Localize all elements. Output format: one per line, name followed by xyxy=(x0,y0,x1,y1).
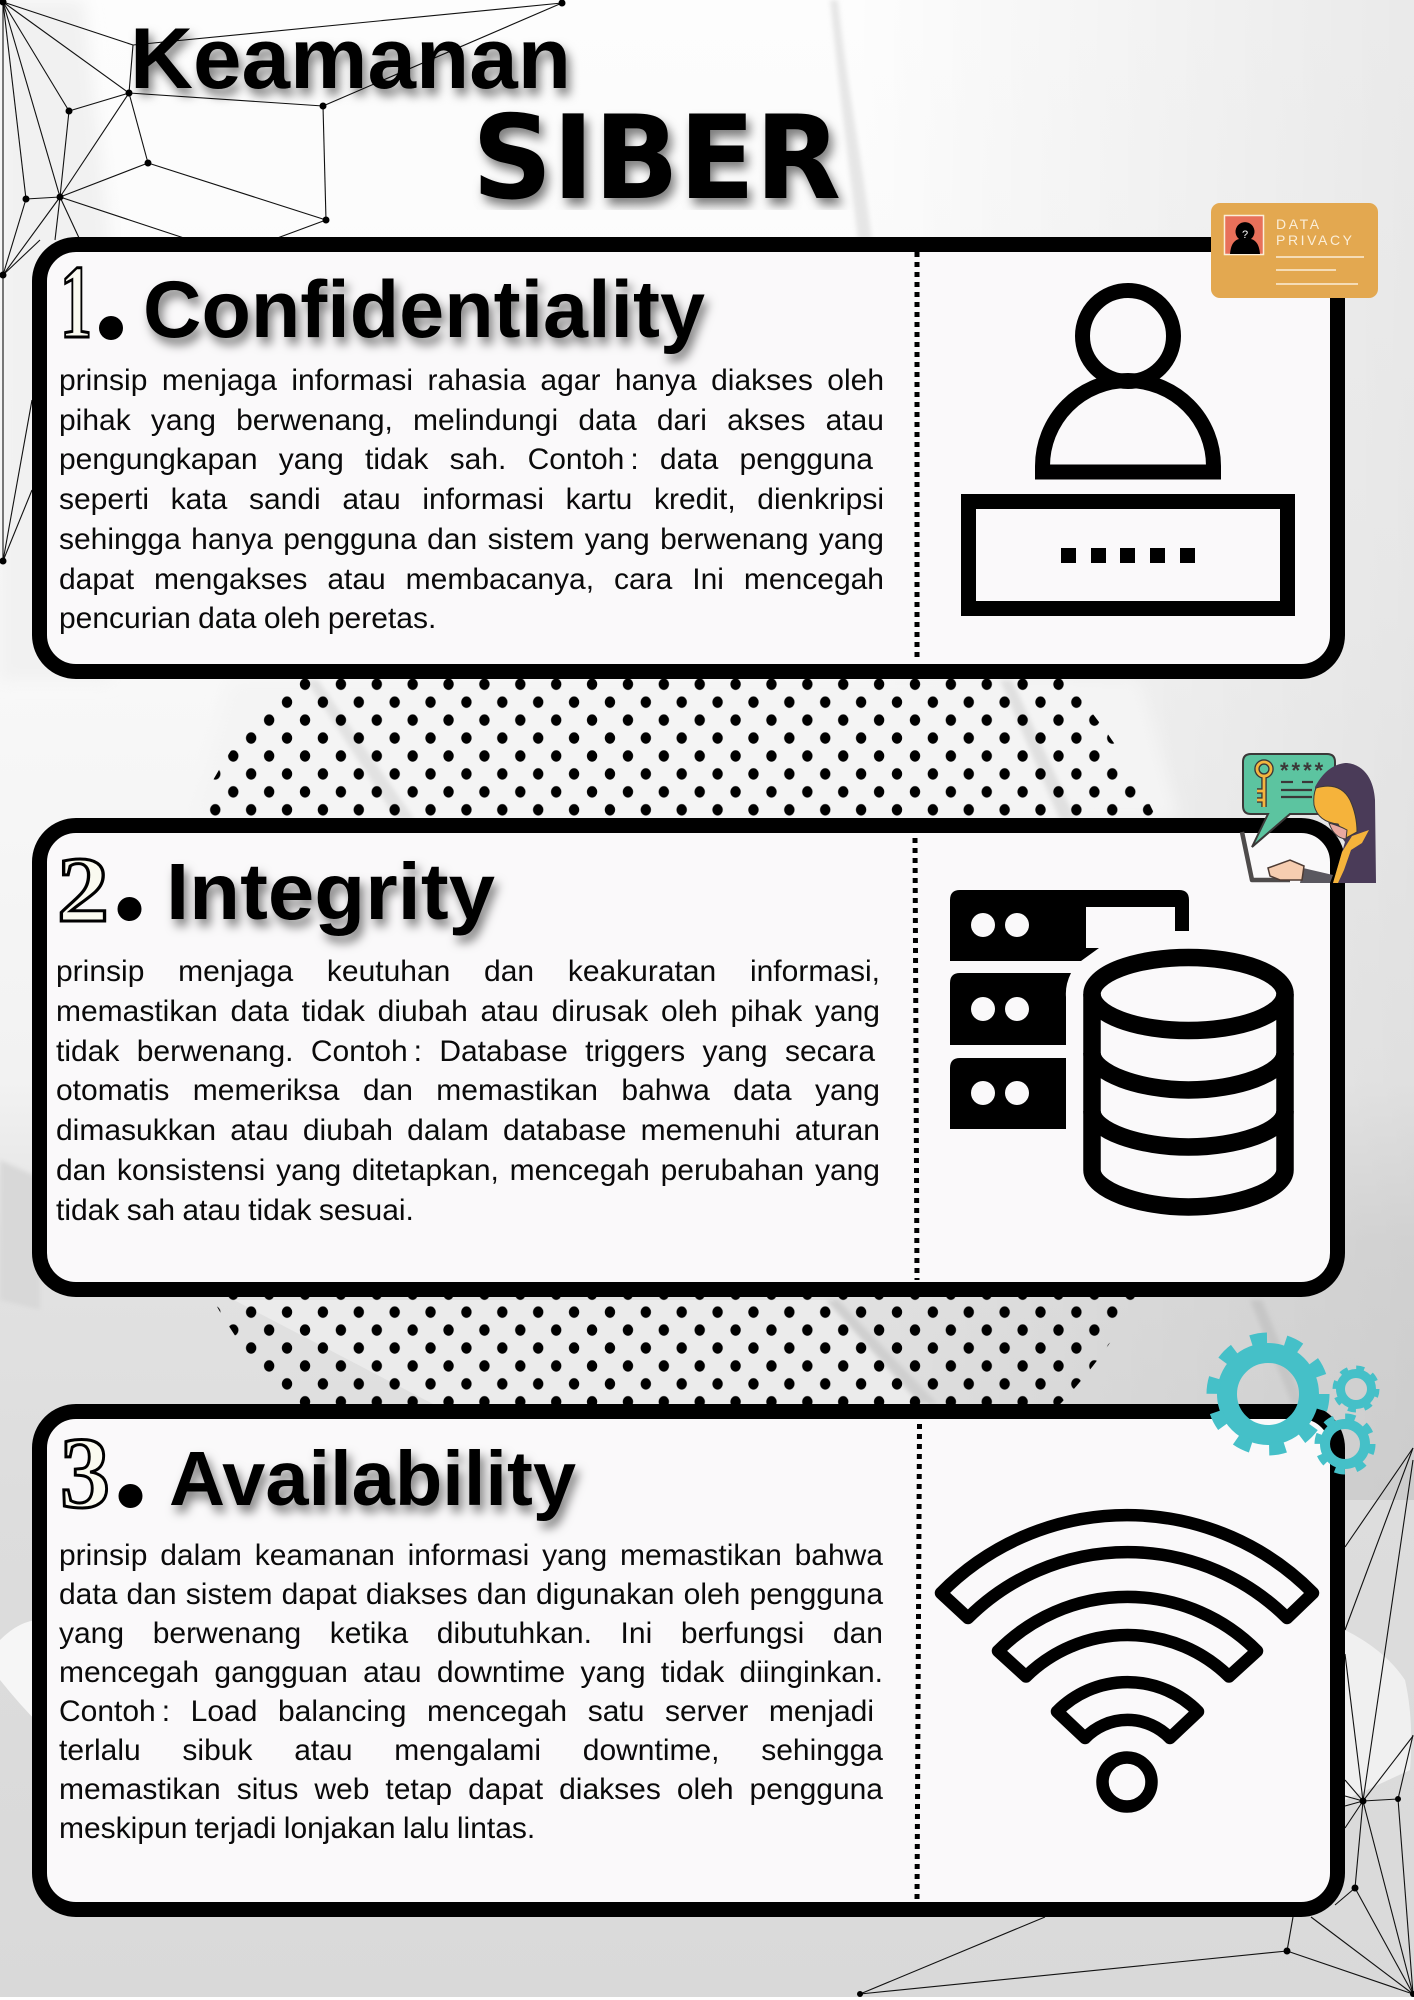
title line: Keamanan: Keamanan xyxy=(130,11,571,107)
text block: availability description: Contoh : Load balancing mencegah satu server menjadi xyxy=(59,1695,874,1728)
text block: confidentiality description: pencurian data oleh peretas. xyxy=(59,602,436,635)
text block: availability description xyxy=(59,1539,884,1845)
fold near title xyxy=(830,0,872,240)
text block: integrity description: tidak berwenang. Contoh : Database triggers yang secara xyxy=(56,1035,875,1068)
small gear bottom xyxy=(1318,1417,1372,1471)
text block: confidentiality description xyxy=(59,364,884,635)
text block: availability description: memastikan situs web tetap dapat diakses oleh pengguna xyxy=(59,1773,883,1806)
text block: availability description: data dan sistem dapat diakses dan digunakan oleh pengguna xyxy=(59,1578,883,1611)
heading and illustration: integrity: 2 xyxy=(57,839,109,942)
text block: confidentiality description: prinsip menjaga informasi rahasia agar hanya diakses oleh xyxy=(59,364,884,397)
text block: availability description: meskipun terjadi lonjakan lalu lintas. xyxy=(59,1812,535,1845)
text block: integrity description: tidak sah atau tidak sesuai. xyxy=(56,1194,414,1227)
heading and illustration: confidentiality xyxy=(60,243,1295,657)
heading and illustration: confidentiality: Confidentiality xyxy=(143,265,705,355)
icon: database cylinder xyxy=(1092,958,1285,1207)
panel: availability xyxy=(32,1404,1345,1917)
heading and illustration: integrity xyxy=(57,838,1294,1280)
sticker: data privacy card xyxy=(1211,203,1378,298)
sticker: data privacy card: DATA xyxy=(1276,216,1322,232)
text block: availability description: mencegah gangguan atau downtime yang tidak diinginkan. xyxy=(59,1656,883,1689)
title xyxy=(130,11,847,210)
text block: confidentiality description: pihak yang berwenang, melindungi data dari akses atau xyxy=(59,404,884,437)
text block: confidentiality description: dapat mengakses atau membacanya, cara Ini mencegah xyxy=(59,563,884,596)
icon: wifi signal xyxy=(941,1515,1313,1806)
icon: user with password box xyxy=(968,290,1288,608)
sticker: hacker with laptop and password bubble xyxy=(1240,753,1376,883)
speech bubble with key: **** xyxy=(1280,758,1326,783)
hooded figure xyxy=(1268,763,1376,883)
text block: integrity description: otomatis memeriksa dan memastikan bahwa data yang xyxy=(56,1074,880,1107)
text block: availability description: prinsip dalam keamanan informasi yang memastikan bahwa xyxy=(59,1539,883,1572)
light field behind upper dots xyxy=(190,680,1180,820)
heading and illustration: availability: Availability xyxy=(169,1436,576,1522)
text block: availability description: yang berwenang ketika dibutuhkan. Ini berfungsi dan xyxy=(59,1617,883,1650)
sticker: data privacy card: ? xyxy=(1242,229,1248,241)
left fold at the top xyxy=(0,0,110,680)
text block: integrity description: memastikan data tidak diubah atau dirusak oleh pihak yang xyxy=(56,995,880,1028)
heading and illustration: confidentiality: 1 xyxy=(60,243,92,360)
network lines top-left xyxy=(0,0,566,564)
laptop xyxy=(1242,832,1290,880)
large gear xyxy=(1213,1339,1323,1449)
text block: integrity description xyxy=(56,955,880,1227)
small gear top xyxy=(1335,1368,1377,1410)
text block: integrity description: dan konsistensi yang ditetapkan, mencegah perubahan yang xyxy=(56,1154,880,1187)
network lines bottom-right xyxy=(857,1448,1414,1997)
heading and illustration: availability xyxy=(60,1417,1320,1899)
text block: confidentiality description: seperti kata sandi atau informasi kartu kredit, dienkripsi xyxy=(59,483,884,516)
panel: integrity xyxy=(32,818,1345,1297)
sticker: teal gears xyxy=(1206,1332,1380,1474)
dot pattern circle xyxy=(145,510,1205,1570)
speech bubble with key xyxy=(1243,754,1335,847)
lower band fold shapes xyxy=(234,1300,929,1404)
text block: confidentiality description: pengungkapan yang tidak sah. Contoh : data pengguna xyxy=(59,443,873,476)
sticker: data privacy card: PRIVACY xyxy=(1276,232,1355,248)
heading and illustration: integrity: Integrity xyxy=(166,847,496,936)
icon: server blocks xyxy=(950,890,1189,1129)
text block: availability description: terlalu sibuk atau mengalami downtime, sehingga xyxy=(59,1734,883,1767)
text block: integrity description: dimasukkan atau diubah dalam database memenuhi aturan xyxy=(56,1114,880,1147)
text block: integrity description: prinsip menjaga keutuhan dan keakuratan informasi, xyxy=(56,955,880,988)
heading and illustration: availability: 3 xyxy=(60,1417,110,1530)
text block: confidentiality description: sehingga hanya pengguna dan sistem yang berwenang yang xyxy=(59,523,884,556)
panel: confidentiality xyxy=(32,237,1345,679)
